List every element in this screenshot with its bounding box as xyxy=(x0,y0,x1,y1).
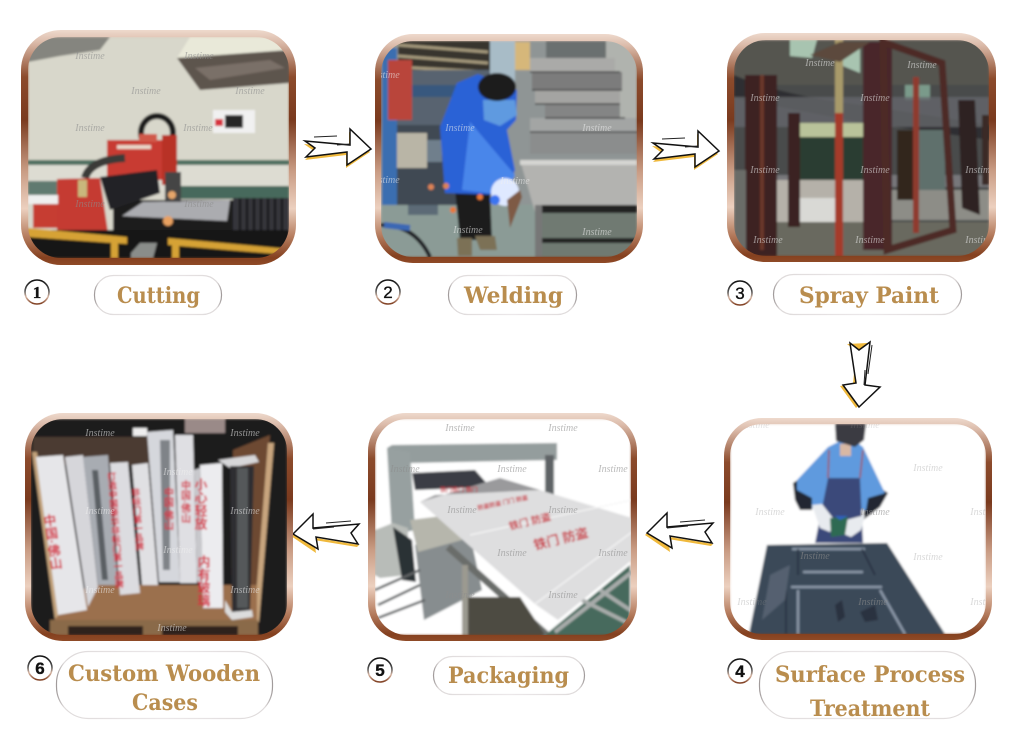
watermarks 6: Instime xyxy=(229,428,260,439)
watermarks 4 xyxy=(736,420,1000,608)
photo: wrapped doors in a wooden crate: 中国·佛山 xyxy=(178,479,190,524)
watermarks 5: Instime xyxy=(547,423,578,434)
photo: strapping machine with wrapped door: 防盗防盗 门门 防盗 xyxy=(477,493,529,512)
watermarks 3: Instime xyxy=(964,235,995,246)
watermarks 3: Instime xyxy=(859,93,890,104)
watermarks 3: Instime xyxy=(854,235,885,246)
watermarks 2: Instime xyxy=(369,175,400,186)
watermarks 2 xyxy=(369,70,612,238)
watermarks 1: Instime xyxy=(74,51,105,62)
photo: strapping machine with wrapped door: 铁门铁门 铁门 xyxy=(440,486,478,494)
photo: worker polishing a door xyxy=(730,420,1000,634)
panel: step 6 custom wooden cases xyxy=(25,413,293,718)
watermarks 4: Instime xyxy=(799,551,830,562)
number badge 4: 4 xyxy=(735,662,745,681)
watermarks 5: Instime xyxy=(444,423,475,434)
label pill: Spray Paint: Spray Paint xyxy=(799,283,940,309)
label pill: Cutting: Cutting xyxy=(117,283,200,309)
label pill: Surface Process Treatment xyxy=(760,652,976,722)
label pill: Cutting xyxy=(94,276,222,314)
watermarks 1: Instime xyxy=(130,86,161,97)
photo: wrapped doors in a wooden crate xyxy=(31,419,287,635)
watermarks 6: Instime xyxy=(84,506,115,517)
arrow: cutting to welding xyxy=(304,129,371,168)
panel: step 2 welding xyxy=(369,34,643,314)
label pill: Welding xyxy=(448,276,576,314)
watermarks 6: Instime xyxy=(84,428,115,439)
number badge 6: 6 xyxy=(35,659,45,678)
panel: step 3 spray paint xyxy=(727,33,996,314)
watermarks 3: Instime xyxy=(964,165,995,176)
photo frame 1 xyxy=(21,30,296,265)
watermarks 5: Instime xyxy=(547,505,578,516)
watermarks 6: Instime xyxy=(162,467,193,478)
label pill: Packaging: Packaging xyxy=(448,663,569,689)
photo frame 2 xyxy=(375,34,643,263)
number badge 3: 3 xyxy=(735,284,745,303)
photo: strapping machine with wrapped door: 铁门 防盗 xyxy=(508,510,552,533)
label pill: Custom Wooden Cases xyxy=(56,652,272,718)
watermarks 4: Instime xyxy=(849,420,880,431)
watermarks 2: Instime xyxy=(581,123,612,134)
photo frame 4 xyxy=(724,418,992,640)
panel: step 1 cutting xyxy=(21,30,296,314)
photo: wrapped doors in a wooden crate: 内有玻璃 xyxy=(196,554,210,608)
label pill: Surface Process Treatment: Surface Process xyxy=(775,662,965,688)
label pill: Surface Process Treatment: Treatment xyxy=(810,696,931,722)
photo: wrapped doors in a wooden crate: 中国·佛山 xyxy=(162,486,174,531)
photo frame 3 xyxy=(727,33,996,262)
watermarks 4: Instime xyxy=(969,597,1000,608)
watermarks 6: Instime xyxy=(229,506,260,517)
watermarks 4: Instime xyxy=(754,507,785,518)
watermarks 1 xyxy=(74,51,265,210)
watermarks 4: Instime xyxy=(969,507,1000,518)
watermarks 2: Instime xyxy=(499,176,530,187)
watermarks 1: Instime xyxy=(183,199,214,210)
photo: strapping machine with wrapped door xyxy=(375,419,632,635)
photo frame 5 xyxy=(368,413,637,641)
number badge 3 xyxy=(728,281,752,305)
number badge 1 xyxy=(25,280,49,304)
watermarks 5: Instime xyxy=(496,548,527,559)
panel: step 4 surface process treatment xyxy=(724,418,1000,722)
watermarks 1: Instime xyxy=(74,199,105,210)
watermarks 2: Instime xyxy=(444,123,475,134)
watermarks 6: Instime xyxy=(162,545,193,556)
watermarks 1: Instime xyxy=(182,123,213,134)
watermarks 3 xyxy=(749,58,995,246)
photo: wrapped doors in a wooden crate: 打造中国豪华非标门第一品牌 xyxy=(106,471,124,590)
label pill: Custom Wooden Cases: Cases xyxy=(132,690,198,716)
watermarks 4: Instime xyxy=(912,463,943,474)
watermarks 6: Instime xyxy=(84,585,115,596)
arrow: packaging to wooden cases xyxy=(291,514,359,553)
watermarks 5: Instime xyxy=(444,590,475,601)
number badge 2: 2 xyxy=(383,283,393,302)
watermarks 6 xyxy=(84,428,260,634)
photo frame 6 xyxy=(25,413,293,641)
number badge 5 xyxy=(368,658,392,682)
watermarks 1: Instime xyxy=(183,51,214,62)
watermarks 4: Instime xyxy=(857,597,888,608)
watermarks 5: Instime xyxy=(389,464,420,475)
watermarks 3: Instime xyxy=(804,58,835,69)
photo: worker welding xyxy=(369,41,637,257)
watermarks 6: Instime xyxy=(229,585,260,596)
watermarks 2: Instime xyxy=(369,70,400,81)
watermarks 4: Instime xyxy=(739,420,770,431)
watermarks 5: Instime xyxy=(597,464,628,475)
watermarks 3: Instime xyxy=(749,93,780,104)
label pill: Welding: Welding xyxy=(463,283,563,309)
watermarks 4: Instime xyxy=(859,507,890,518)
photo: strapping machine with wrapped door: 铁门 防盗 xyxy=(532,525,590,553)
watermarks 1: Instime xyxy=(234,86,265,97)
watermarks 3: Instime xyxy=(749,165,780,176)
number badge 4 xyxy=(728,659,752,683)
watermarks 5: Instime xyxy=(547,590,578,601)
photo: wrapped doors in a wooden crate: 非标门第一品牌 xyxy=(130,487,144,552)
watermarks 3: Instime xyxy=(859,165,890,176)
watermarks 3: Instime xyxy=(906,60,937,71)
photo: painted door frames hanging xyxy=(734,40,995,256)
watermarks 2: Instime xyxy=(452,225,483,236)
number badge 2 xyxy=(376,280,400,304)
watermarks 4: Instime xyxy=(912,552,943,563)
photo: wrapped doors in a wooden crate: 小心轻放 xyxy=(192,478,208,531)
watermarks 6: Instime xyxy=(156,623,187,634)
panel: step 5 packaging xyxy=(368,413,637,694)
watermarks 5 xyxy=(389,423,628,601)
watermarks 5: Instime xyxy=(446,505,477,516)
label pill: Custom Wooden Cases: Custom Wooden xyxy=(68,661,260,687)
photo: laser cutting machine xyxy=(28,37,289,258)
number badge 5: 5 xyxy=(375,661,385,680)
watermarks 2: Instime xyxy=(581,227,612,238)
watermarks 4: Instime xyxy=(736,597,767,608)
watermarks 1: Instime xyxy=(74,123,105,134)
label pill: Spray Paint xyxy=(774,274,962,314)
watermarks 3: Instime xyxy=(752,235,783,246)
watermarks 5: Instime xyxy=(597,548,628,559)
label pill: Packaging xyxy=(434,656,584,694)
arrow: surface treatment to packaging xyxy=(645,513,713,552)
arrow: welding to spray paint xyxy=(652,131,719,170)
arrow: spray paint to surface treatment xyxy=(840,342,880,408)
watermarks 5: Instime xyxy=(496,464,527,475)
number badge 6 xyxy=(28,656,52,680)
photo: wrapped doors in a wooden crate: 中国·佛山 xyxy=(40,512,63,572)
number badge 1: 1 xyxy=(33,283,41,302)
